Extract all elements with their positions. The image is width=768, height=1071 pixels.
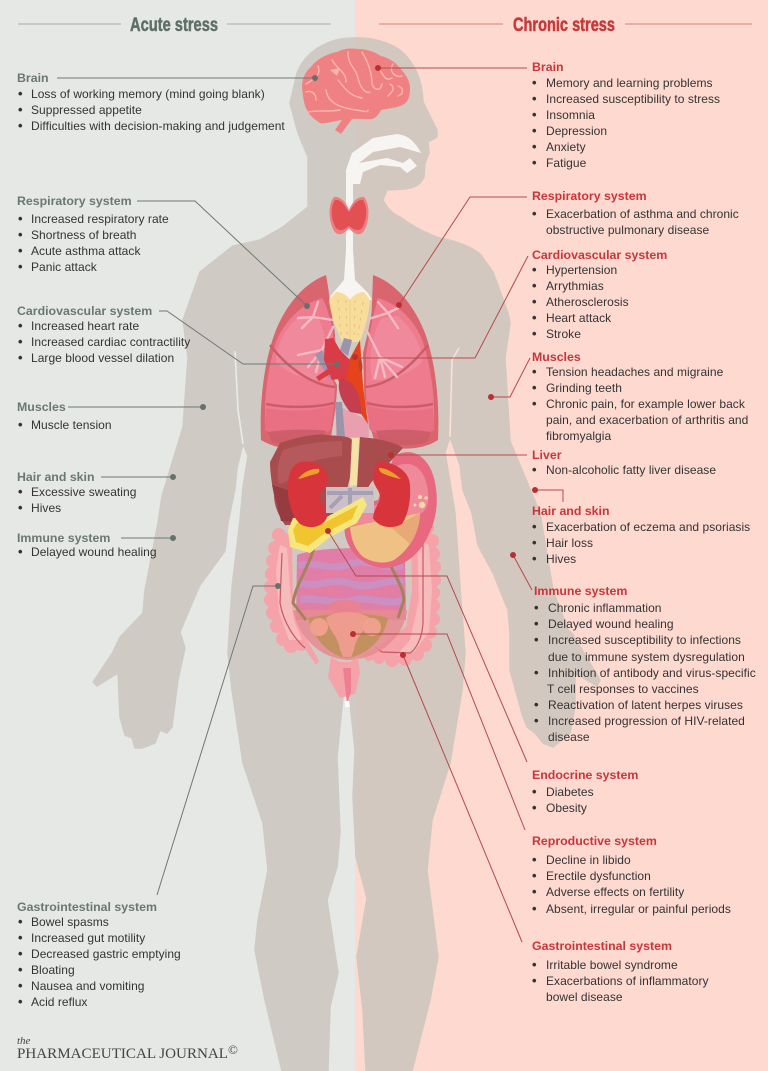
panel: chronic reproductive system: • xyxy=(532,901,537,916)
panel: acute cardiovascular system: • xyxy=(18,350,23,365)
panel: chronic muscles: Muscles xyxy=(532,350,581,364)
bronchi right xyxy=(365,302,402,378)
panel: acute brain: Brain xyxy=(17,71,49,85)
panel: acute respiratory system: • xyxy=(18,211,23,226)
panel: chronic cardiovascular system: Arrythmias xyxy=(546,279,604,293)
footer logo: The Pharmaceutical Journal: PHARMACEUTICAL JOURNAL xyxy=(17,1046,228,1062)
panel: acute respiratory system: • xyxy=(18,259,23,274)
panel: chronic brain: Brain xyxy=(532,60,564,74)
panel: chronic cardiovascular system: Stroke xyxy=(546,327,581,341)
panel: chronic brain: Increased susceptibility to stress xyxy=(546,92,720,106)
organ: pancreas xyxy=(288,497,367,553)
panel: chronic muscles: pain, and exacerbation of arthritis and xyxy=(546,413,748,427)
panel: chronic respiratory system xyxy=(532,189,739,237)
panel: chronic brain: • xyxy=(532,155,537,170)
organ: heart xyxy=(315,338,369,438)
panel: chronic brain: Memory and learning problems xyxy=(546,76,713,90)
leader: acute muscles xyxy=(68,404,206,410)
leader: acute hair and skin xyxy=(101,474,176,480)
panel: chronic immune system: • xyxy=(534,600,539,615)
panel: acute brain: Suppressed appetite xyxy=(31,103,142,117)
panel: chronic muscles: fibromyalgia xyxy=(546,429,611,443)
panel: acute respiratory system: Increased respiratory rate xyxy=(31,212,169,226)
panel: chronic liver: Non-alcoholic fatty liver disease xyxy=(546,463,716,477)
panel: acute respiratory system: Acute asthma attack xyxy=(31,244,141,258)
panel: chronic immune system: • xyxy=(534,616,539,631)
organ: vessels behind kidneys xyxy=(326,487,374,513)
panel: chronic cardiovascular system: • xyxy=(532,294,537,309)
panel: chronic immune system xyxy=(534,584,756,744)
panel: chronic immune system: • xyxy=(534,697,539,712)
panel: chronic cardiovascular system: • xyxy=(532,278,537,293)
panel: chronic brain: • xyxy=(532,123,537,138)
panel: acute respiratory system: Respiratory system xyxy=(17,194,132,208)
panel: acute brain xyxy=(17,71,285,133)
panel: acute respiratory system: Panic attack xyxy=(31,260,98,274)
panel: chronic immune system: Chronic inflammation xyxy=(548,601,662,615)
organ: colon left xyxy=(264,528,319,665)
panel: chronic muscles: • xyxy=(532,380,537,395)
panel: chronic endocrine system: • xyxy=(532,800,537,815)
panel: chronic immune system: Increased susceptibility to infections xyxy=(548,633,741,647)
leader: acute respiratory xyxy=(137,201,310,309)
organ: pelvis and uterus xyxy=(293,600,407,660)
panel: acute gastrointestinal system: Decreased gastric emptying xyxy=(31,947,181,961)
panel: acute cardiovascular system: Increased cardiac contractility xyxy=(31,335,190,349)
panel: acute brain: Loss of working memory (mind going blank) xyxy=(31,87,265,101)
panel: chronic reproductive system: Reproductive system xyxy=(532,834,657,848)
panel: acute gastrointestinal system: Nausea and vomiting xyxy=(31,979,144,993)
panel: chronic endocrine system xyxy=(532,768,638,815)
panel: acute cardiovascular system: • xyxy=(18,318,23,333)
organ: lung left xyxy=(261,275,337,449)
organ: thyroid xyxy=(330,197,368,234)
panel: acute muscles xyxy=(17,400,112,432)
panel: chronic reproductive system: • xyxy=(532,868,537,883)
panel: chronic gastrointestinal system: Exacerbations of inflammatory xyxy=(546,974,709,988)
panel: acute hair and skin xyxy=(17,470,136,515)
panel: chronic muscles: • xyxy=(532,364,537,379)
footer logo: The Pharmaceutical Journal: the xyxy=(17,1035,31,1047)
panel: acute immune system: • xyxy=(18,544,23,559)
panel: chronic cardiovascular system: • xyxy=(532,326,537,341)
panel: acute hair and skin: • xyxy=(18,484,23,499)
panel: chronic hair and skin: • xyxy=(532,535,537,550)
panel: chronic gastrointestinal system: Gastrointestinal system xyxy=(532,939,672,953)
bronchi left xyxy=(298,302,333,372)
panel: chronic hair and skin: Exacerbation of eczema and psoriasis xyxy=(546,520,750,534)
panel: chronic liver: • xyxy=(532,462,537,477)
footer logo: The Pharmaceutical Journal xyxy=(17,1035,238,1062)
panel: chronic immune system: Inhibition of antibody and virus-specific xyxy=(548,666,756,680)
panel: acute gastrointestinal system: • xyxy=(18,994,23,1009)
panel: chronic liver xyxy=(532,448,716,477)
panel: chronic immune system: Delayed wound healing xyxy=(548,617,674,631)
panel: acute cardiovascular system: • xyxy=(18,334,23,349)
panel: chronic gastrointestinal system xyxy=(532,939,709,1004)
panel: acute gastrointestinal system: Gastrointestinal system xyxy=(17,900,157,914)
panel: chronic brain: Depression xyxy=(546,124,607,138)
organ: liver xyxy=(270,435,403,525)
panel: chronic gastrointestinal system: • xyxy=(532,957,537,972)
panel: chronic gastrointestinal system: • xyxy=(532,973,537,988)
leader: chronic endocrine xyxy=(325,528,527,762)
panel: acute gastrointestinal system: • xyxy=(18,978,23,993)
panel: chronic immune system: • xyxy=(534,665,539,680)
organ: thymus xyxy=(329,292,370,342)
panel: chronic reproductive system: • xyxy=(532,852,537,867)
panel: chronic reproductive system: Decline in libido xyxy=(546,853,631,867)
leader: acute brain xyxy=(57,75,318,81)
panel: chronic brain: • xyxy=(532,107,537,122)
panel: chronic hair and skin xyxy=(532,504,750,566)
panel: chronic hair and skin: • xyxy=(532,551,537,566)
panel: chronic gastrointestinal system: bowel disease xyxy=(546,990,623,1004)
panel: acute gastrointestinal system: Bloating xyxy=(31,963,75,977)
panel: chronic immune system: Immune system xyxy=(534,584,627,598)
panel: chronic hair and skin: • xyxy=(532,519,537,534)
leader: chronic gastrointestinal xyxy=(400,652,522,942)
panel: chronic brain: • xyxy=(532,139,537,154)
panel: chronic muscles: • xyxy=(532,396,537,411)
organ: colon right xyxy=(364,521,441,667)
panel: acute gastrointestinal system: • xyxy=(18,946,23,961)
panel: acute gastrointestinal system xyxy=(17,900,181,1009)
panel: chronic respiratory system: obstructive pulmonary disease xyxy=(546,223,710,237)
armpit highlight: right xyxy=(450,348,459,437)
panel: chronic immune system: Reactivation of latent herpes viruses xyxy=(548,698,743,712)
panel: acute hair and skin: Hives xyxy=(31,501,61,515)
panel: chronic respiratory system: Exacerbation of asthma and chronic xyxy=(546,207,739,221)
panel: chronic muscles: Tension headaches and migraine xyxy=(546,365,724,379)
panel: chronic cardiovascular system: Hypertension xyxy=(546,263,617,277)
panel: chronic reproductive system xyxy=(532,834,731,916)
panel: chronic hair and skin: Hair loss xyxy=(546,536,593,550)
panel: chronic respiratory system: • xyxy=(532,206,537,221)
panel: acute gastrointestinal system: • xyxy=(18,962,23,977)
panel: chronic immune system: • xyxy=(534,632,539,647)
panel: chronic gastrointestinal system: Irritable bowel syndrome xyxy=(546,958,678,972)
panel: chronic cardiovascular system: • xyxy=(532,262,537,277)
panel: chronic cardiovascular system xyxy=(532,248,667,341)
panel: chronic reproductive system: Adverse effects on fertility xyxy=(546,885,684,899)
panel: chronic muscles: Chronic pain, for example lower back xyxy=(546,397,746,411)
organ: kidneys xyxy=(288,461,410,527)
panel: chronic reproductive system: Erectile dysfunction xyxy=(546,869,651,883)
leader: acute gastrointestinal xyxy=(157,583,281,895)
leader: chronic liver xyxy=(388,452,527,458)
body silhouette xyxy=(93,38,600,1071)
panel: chronic brain: • xyxy=(532,75,537,90)
organ: small intestine xyxy=(296,548,406,620)
background: acute side xyxy=(0,0,355,1071)
panel: chronic endocrine system: Obesity xyxy=(546,801,587,815)
leader: acute immune xyxy=(121,535,176,541)
leader: acute cardiovascular xyxy=(159,311,340,367)
organ: brain xyxy=(302,48,410,134)
panel: acute brain: • xyxy=(18,86,23,101)
leader: chronic reproductive xyxy=(350,631,525,830)
background: chronic side xyxy=(355,0,768,1071)
panel: acute cardiovascular system: Cardiovascular system xyxy=(17,304,152,318)
panel: acute cardiovascular system xyxy=(17,304,190,365)
panel: acute respiratory system: • xyxy=(18,227,23,242)
header: chronic stress: Chronic stress xyxy=(513,15,615,36)
panel: chronic immune system: T cell responses to vaccines xyxy=(547,682,699,696)
organ: lung right xyxy=(363,275,438,449)
panel: acute cardiovascular system: Large blood vessel dilation xyxy=(31,351,174,365)
panel: chronic brain: Fatigue xyxy=(546,156,587,170)
organ: rectum xyxy=(328,657,360,707)
leader: chronic muscles xyxy=(488,358,530,400)
panel: acute respiratory system: Shortness of breath xyxy=(31,228,136,242)
panel: chronic muscles: Grinding teeth xyxy=(546,381,622,395)
panel: chronic muscles xyxy=(532,350,748,443)
panel: chronic reproductive system: Absent, irregular or painful periods xyxy=(546,902,731,916)
panel: chronic brain: Insomnia xyxy=(546,108,595,122)
panel: chronic immune system: Increased progression of HIV-related xyxy=(548,714,745,728)
panel: acute brain: Difficulties with decision-making and judgement xyxy=(31,119,285,133)
panel: chronic cardiovascular system: • xyxy=(532,310,537,325)
panel: chronic brain: Anxiety xyxy=(546,140,586,154)
panel: acute muscles: Muscles xyxy=(17,400,66,414)
panel: acute hair and skin: • xyxy=(18,500,23,515)
leader: chronic respiratory xyxy=(396,197,527,308)
panel: acute gastrointestinal system: • xyxy=(18,930,23,945)
panel: chronic reproductive system: • xyxy=(532,884,537,899)
panel: acute gastrointestinal system: Bowel spasms xyxy=(31,915,109,929)
panel: chronic respiratory system: Respiratory system xyxy=(532,189,647,203)
panel: chronic immune system: disease xyxy=(548,730,590,744)
airway xyxy=(328,134,421,300)
panel: acute hair and skin: Excessive sweating xyxy=(31,485,136,499)
panel: chronic liver: Liver xyxy=(532,448,562,462)
leader: chronic brain xyxy=(375,65,527,71)
panel: chronic endocrine system: • xyxy=(532,784,537,799)
panel: acute immune system xyxy=(17,531,157,559)
leader: chronic cardiovascular xyxy=(352,256,528,360)
header: acute stress: Acute stress xyxy=(130,15,218,36)
panel: acute brain: • xyxy=(18,118,23,133)
panel: acute gastrointestinal system: Acid reflux xyxy=(31,995,87,1009)
panel: chronic hair and skin: Hives xyxy=(546,552,576,566)
footer logo: The Pharmaceutical Journal: © xyxy=(228,1042,238,1057)
panel: acute gastrointestinal system: • xyxy=(18,914,23,929)
panel: acute gastrointestinal system: Increased gut motility xyxy=(31,931,145,945)
panel: chronic cardiovascular system: Heart attack xyxy=(546,311,612,325)
panel: acute respiratory system: • xyxy=(18,243,23,258)
panel: chronic brain xyxy=(532,60,720,170)
panel: acute muscles: • xyxy=(18,417,23,432)
panel: chronic cardiovascular system: Cardiovascular system xyxy=(532,248,667,262)
panel: acute brain: • xyxy=(18,102,23,117)
panel: chronic endocrine system: Endocrine system xyxy=(532,768,638,782)
panel: acute immune system: Immune system xyxy=(17,531,110,545)
organ: stomach xyxy=(344,452,437,568)
leader: chronic hair and skin xyxy=(532,487,563,502)
panel: chronic hair and skin: Hair and skin xyxy=(532,504,610,518)
panel: chronic immune system: due to immune system dysregulation xyxy=(548,650,745,664)
panel: acute immune system: Delayed wound healing xyxy=(31,545,157,559)
panel: chronic cardiovascular system: Atherosclerosis xyxy=(546,295,629,309)
leader: chronic immune xyxy=(510,552,532,590)
panel: chronic immune system: • xyxy=(534,713,539,728)
panel: chronic endocrine system: Diabetes xyxy=(546,785,594,799)
panel: acute hair and skin: Hair and skin xyxy=(17,470,95,484)
panel: chronic brain: • xyxy=(532,91,537,106)
panel: acute cardiovascular system: Increased heart rate xyxy=(31,319,139,333)
organ: ureters xyxy=(293,528,404,620)
armpit highlight: left xyxy=(235,351,243,444)
panel: acute muscles: Muscle tension xyxy=(31,418,112,432)
panel: acute respiratory system xyxy=(17,194,169,274)
